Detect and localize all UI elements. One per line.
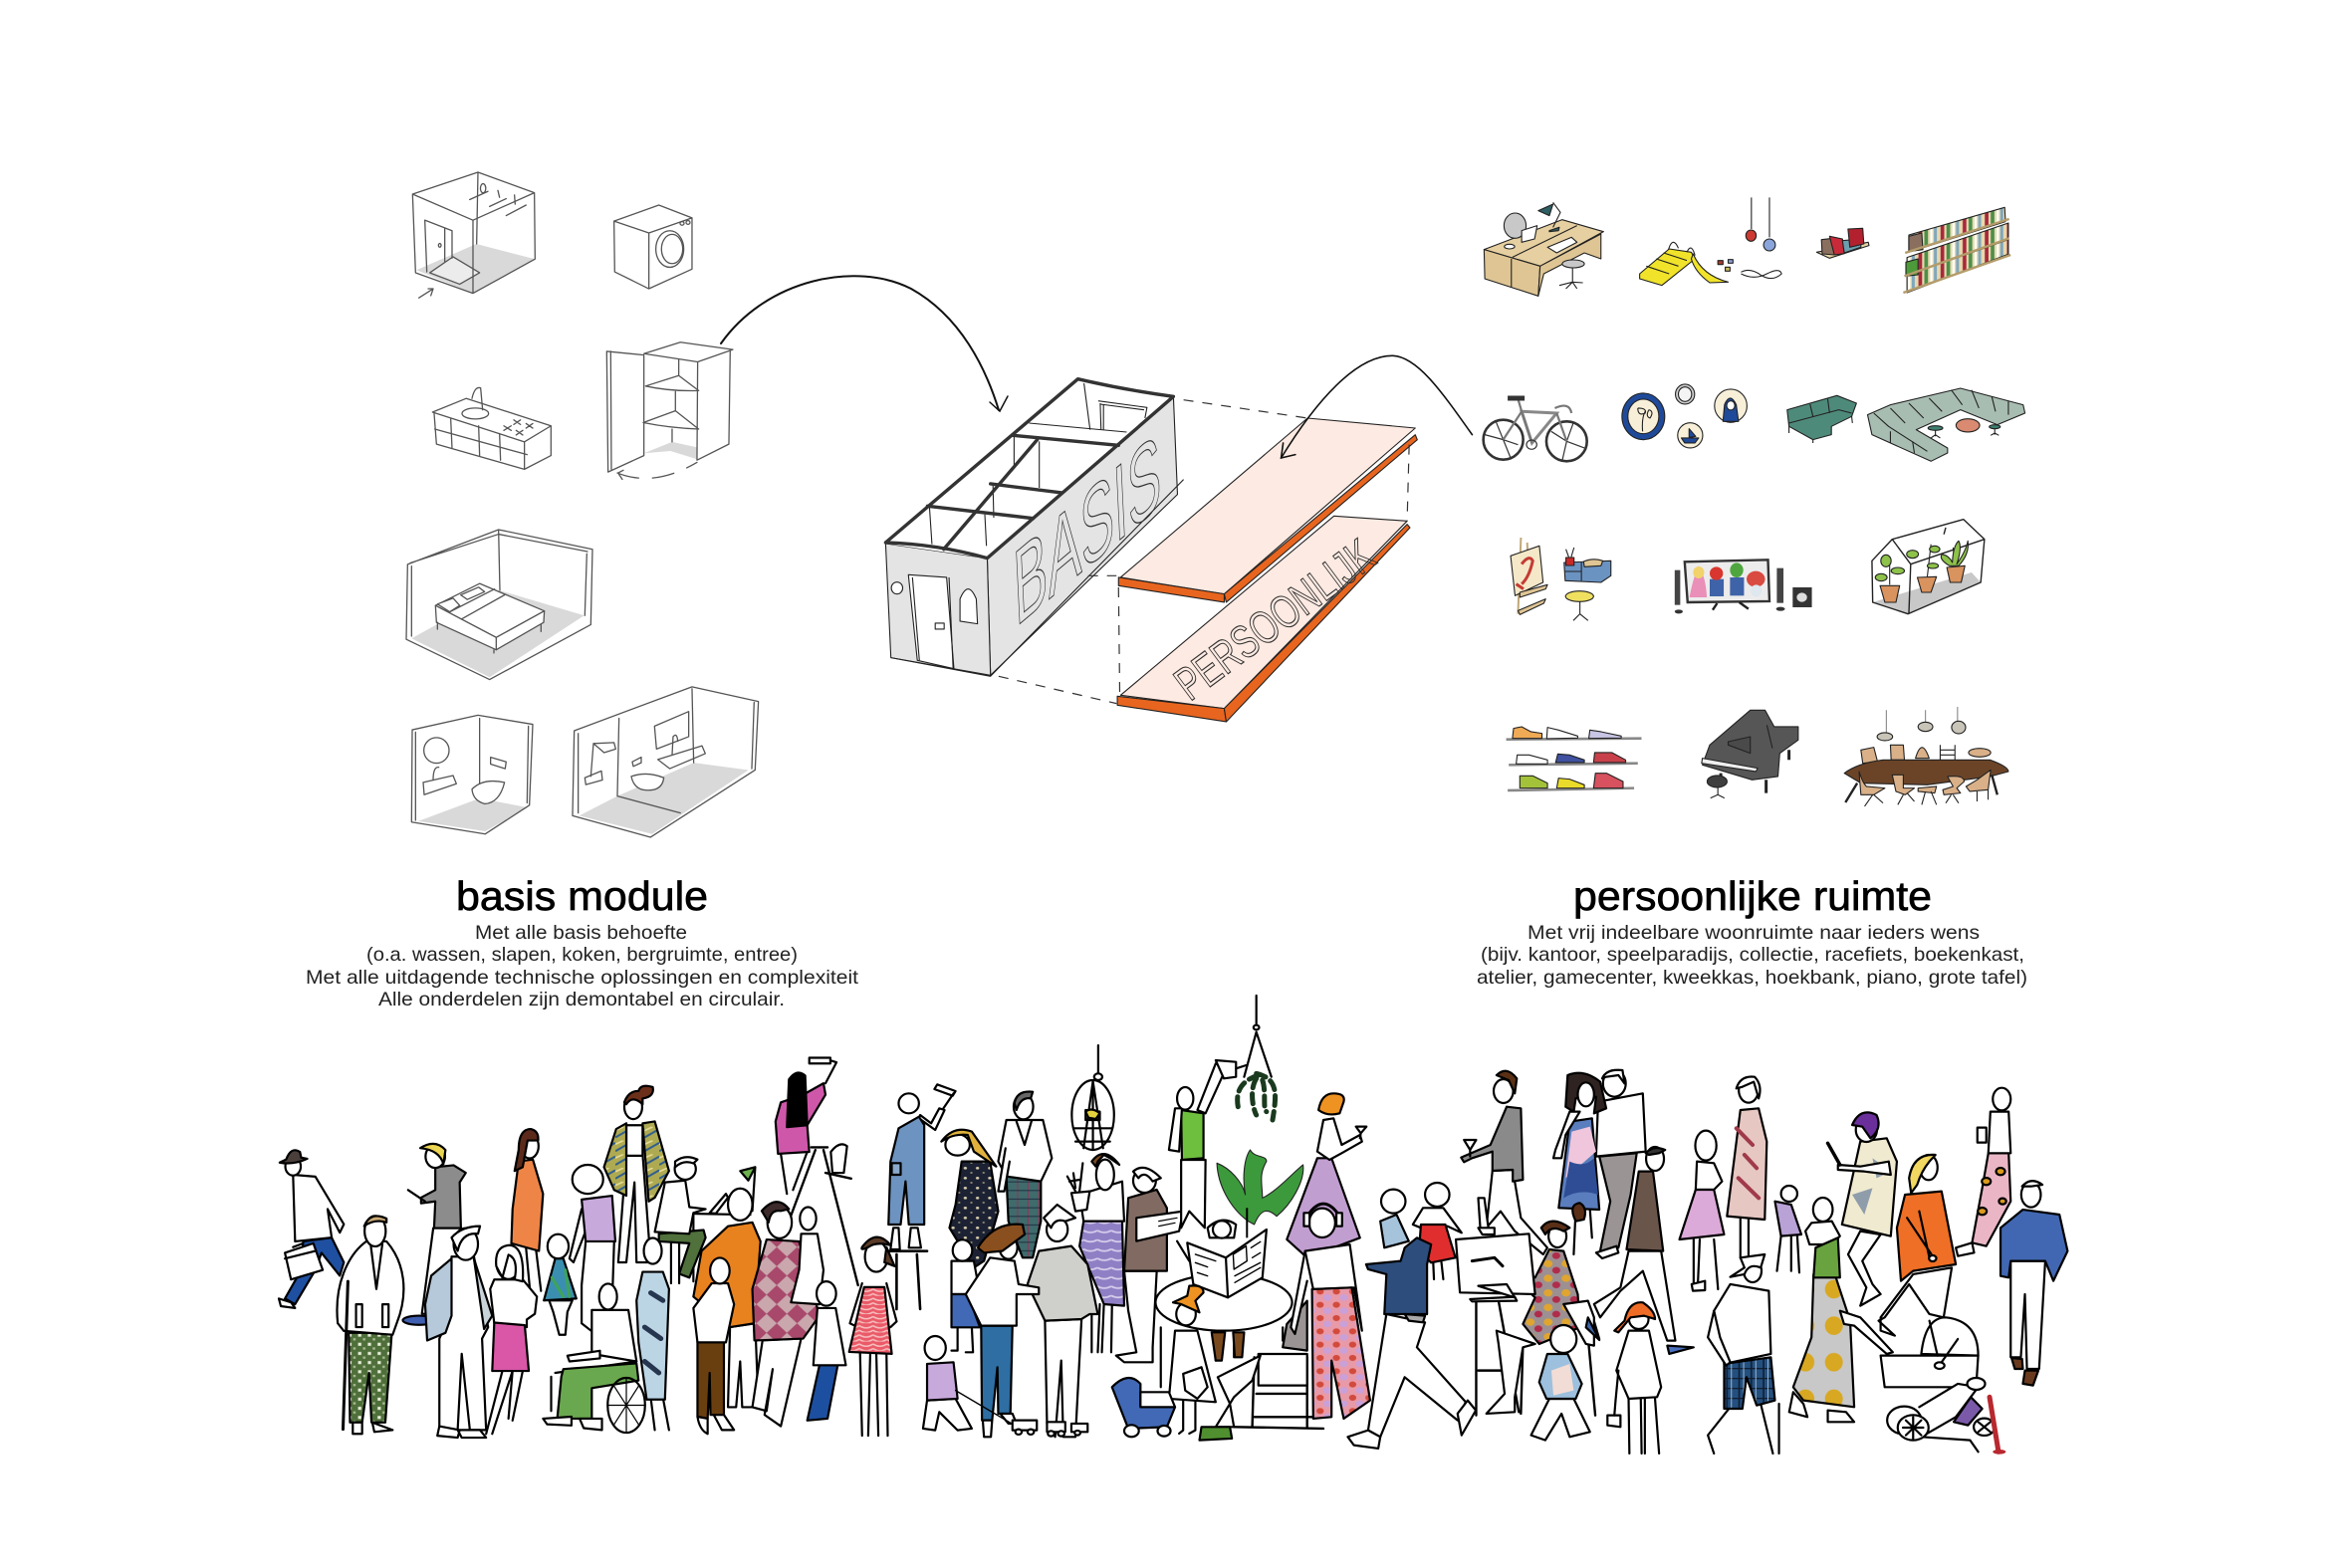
top slab: persoonlijk ceiling [1118,418,1417,602]
icon: racing bicycle [1484,398,1587,461]
figure: woman with green scarf and yellow dots dress [1789,1237,1893,1422]
icon: kitchen counter sketch [432,387,551,469]
figure: reader behind newspaper [1177,1221,1236,1261]
figure: man with cane and green plaid trousers [337,1216,403,1434]
figure: woman with brown hair and purple skirt [1067,1154,1124,1352]
figure: child with blue trousers [808,1281,845,1421]
text block: basis module description: Alle onderdelen zijn demontabel en circulair. [378,989,785,1010]
figure: woman in pink floral dress [1727,1076,1766,1257]
heading: basis module: basis module [456,873,708,919]
handwritten label: BASIS: BASIS [1011,409,1163,650]
arrow: from personal items to slab [1282,355,1472,458]
figure: woman with pink skirt [486,1245,537,1434]
module roof frame [885,379,1173,559]
figure: walking man with hat and briefcase [279,1150,344,1308]
figure: woman pushing pram, orange top [1879,1155,1956,1336]
figure: toddler with toy train [923,1336,1087,1437]
icon: green sofa [1787,395,1856,443]
figure: man with brown dotted jacket [1588,1147,1694,1354]
figure: woman with green top and watering can [1169,1060,1246,1228]
table: round table [1155,1274,1293,1387]
icon: wardrobe with shelves sketch [606,342,733,479]
figure: girl with pink skirt [1680,1131,1724,1291]
furniture: chair with green slippers [1200,1301,1323,1441]
figure: child with striped shirt [1380,1190,1409,1247]
figure: woman with headphones and floral trousers [1291,1204,1370,1419]
heading: persoonlijke ruimte: persoonlijke ruimte [1573,873,1932,919]
figure: child with colorful jacket [544,1234,577,1335]
figure: girl with red zebra dress [849,1237,896,1436]
panel: crowd, middle section [888,996,1476,1449]
figure: blonde woman in floral dress [941,1130,998,1267]
figure: child in white shirt [1805,1198,1840,1244]
figure: girl with orange hair [1607,1302,1661,1454]
figure: man in blue sweater [2000,1181,2067,1386]
figure: woman in blue white dress [636,1238,669,1430]
icon: baby pram [1881,1317,1979,1387]
icon: small book shelf [1816,228,1869,258]
figure: child on tricycle [1887,1378,2005,1455]
figure: girl with orange hair and bag [1169,1285,1216,1434]
figure: couple [1553,1070,1646,1258]
module side and front walls [885,379,1184,676]
figure: man in brown striped coat with paper [1116,1168,1183,1362]
figure: gray hoodie man with phone [403,1144,466,1325]
icon: large bookcase [1903,207,2010,293]
figure: man with blue striped jacket [425,1227,492,1438]
icon: shoe shelves [1507,727,1641,790]
icon: bird cage [1071,1045,1114,1150]
figure: orange poncho woman [693,1189,761,1407]
panel: crowd, left section [279,1057,896,1438]
figure: painter seated at easel [1456,1198,1599,1416]
text block: basis module description: Met alle basis behoefte [475,922,687,944]
figure: woman in orange dress [511,1129,543,1291]
dashed projection lines [999,400,1409,704]
figure: man with plaid shorts [1708,1254,1779,1454]
icon: washing machine sketch [614,205,692,289]
figure: curly haired woman from behind [570,1165,615,1333]
panel: crowd, right section [1456,1070,2067,1455]
icon: bedroom sketch [406,530,592,680]
icon: blue toy stroller [1112,1378,1175,1437]
text block: persoonlijke ruimte description: Met vrij indeelbare woonruimte naar ieders wens [1528,922,1980,944]
arrow: from basis sketches to module [721,276,1008,411]
text block: persoonlijke ruimte description [1477,922,2027,989]
figure: woman in knit sweater [1028,1205,1097,1437]
figure: person in overalls on stool with roller [888,1084,956,1309]
icon: television with game characters and speakers [1675,560,1812,613]
figure: woman with lilac skirt and orange hair [1287,1093,1366,1257]
text block: basis module description: Met alle uitdagende technische oplossingen en complexiteit [306,967,859,989]
figure: tall woman in patterned jacket [604,1086,669,1262]
icon: greenhouse with plants [1872,520,1985,614]
panel: central module diagram [885,379,1417,722]
text block: basis module description [306,922,859,1010]
figure: woman with polka trousers [1956,1088,2010,1256]
figure: doll-like girl with red skirt [1413,1183,1462,1279]
icon: long bathroom sketch [573,687,759,837]
icon: grand piano [1702,710,1798,798]
panel: basis module sketches [406,172,759,837]
figure: woman with curly hair and jeans [966,1225,1039,1437]
icon: large corner sofa [1867,388,2025,461]
figure: person in navy hoodie walking [1348,1237,1476,1449]
panel: personal space items, upper rows [1484,197,2025,461]
icon: hanging plant [1238,996,1276,1120]
text block: persoonlijke ruimte description: atelier, gamecenter, kweekkas, hoekbank, piano, grote tafel) [1477,967,2027,989]
figure: child held by woman [791,1208,823,1304]
handwritten label: PERSOONLIJK: PERSOONLIJK [1165,529,1384,710]
icon: dining table with chairs and lamps [1844,707,2008,806]
icon: wall medallions [1622,384,1747,448]
figure: woman on ladder with paint roller [776,1057,858,1285]
panel: personal space items, lower rows [1507,520,2008,806]
figure: man at laptop with green lamp [655,1157,755,1283]
figure: man in gray sweater with glass [1461,1071,1547,1254]
icon: play stairs with slide and baubles [1640,197,1781,286]
icon: entrance room sketch [412,172,535,298]
figure: child in lilac shirt [1774,1186,1801,1272]
figure: woman with purple hair in cream dress [1828,1112,1897,1306]
icon: newspaper [1187,1230,1267,1297]
figure: child in blue shirt [1531,1325,1590,1441]
icon: small bathroom sketch [411,715,533,834]
icon: potted plant [1217,1150,1303,1237]
icon: desk with lamp [1484,202,1603,296]
figure: boy with brown trousers [693,1257,734,1434]
icon: painting easel and stool [1511,538,1611,620]
text block: basis module description: (o.a. wassen, slapen, koken, bergruimte, entree) [366,944,798,966]
figure: man in wheelchair [543,1283,645,1433]
figure: child in blue overalls [952,1239,980,1352]
text block: persoonlijke ruimte description: (bijv. kantoor, speelparadijs, collectie, racefiets, boekenkast, [1481,944,2024,966]
figure: man with tartan trousers [998,1091,1052,1257]
figure: woman in pink tie-dye dress [753,1202,820,1427]
bottom slab: persoonlijk floor [1117,516,1410,722]
